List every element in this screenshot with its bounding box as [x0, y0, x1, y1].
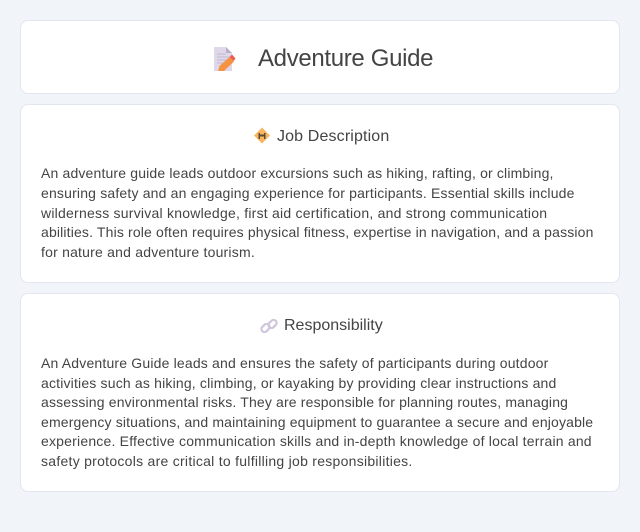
icon: road sign	[254, 128, 270, 144]
icon: chain link	[260, 318, 278, 334]
text block: job description: for nature and adventure tourism.	[41, 244, 255, 260]
text block: responsibility: safety protocols are critical to fulfilling job responsibilities.	[41, 453, 413, 469]
text block: job description: abilities. This role often requires physical fitness, expertise in navigation, and a passion	[41, 224, 594, 240]
text block: job description: An adventure guide leads outdoor excursions such as hiking, rafting, or climbing,	[41, 165, 554, 181]
text block: responsibility: assessing environmental risks. They are responsible for planning routes, managing	[41, 394, 568, 410]
title text: Adventure Guide	[258, 45, 433, 72]
icon: document with pencil	[214, 47, 236, 71]
text block: job description: ensuring safety and an engaging experience for participants. Essential skills include	[41, 185, 575, 201]
text block: job description: wilderness survival knowledge, first aid certification, and strong communication	[41, 205, 547, 221]
panel: title	[20, 20, 620, 94]
text block: responsibility: An Adventure Guide leads and ensures the safety of participants during outdoor	[41, 355, 548, 371]
heading: responsibility: Responsibility	[284, 317, 383, 334]
panel: responsibility	[20, 293, 620, 492]
text block: responsibility	[41, 355, 593, 469]
panel: job description	[20, 104, 620, 283]
text block: job description	[41, 165, 594, 260]
text block: responsibility: emergency situations, and maintaining equipment to guarantee a secure and enjoyable	[41, 414, 593, 430]
text block: responsibility: activities such as hiking, climbing, or kayaking by providing clear instructions and	[41, 375, 556, 391]
heading: job description: Job Description	[277, 128, 389, 145]
text block: responsibility: experience. Effective communication skills and in-depth knowledge of local terrain and	[41, 433, 592, 449]
